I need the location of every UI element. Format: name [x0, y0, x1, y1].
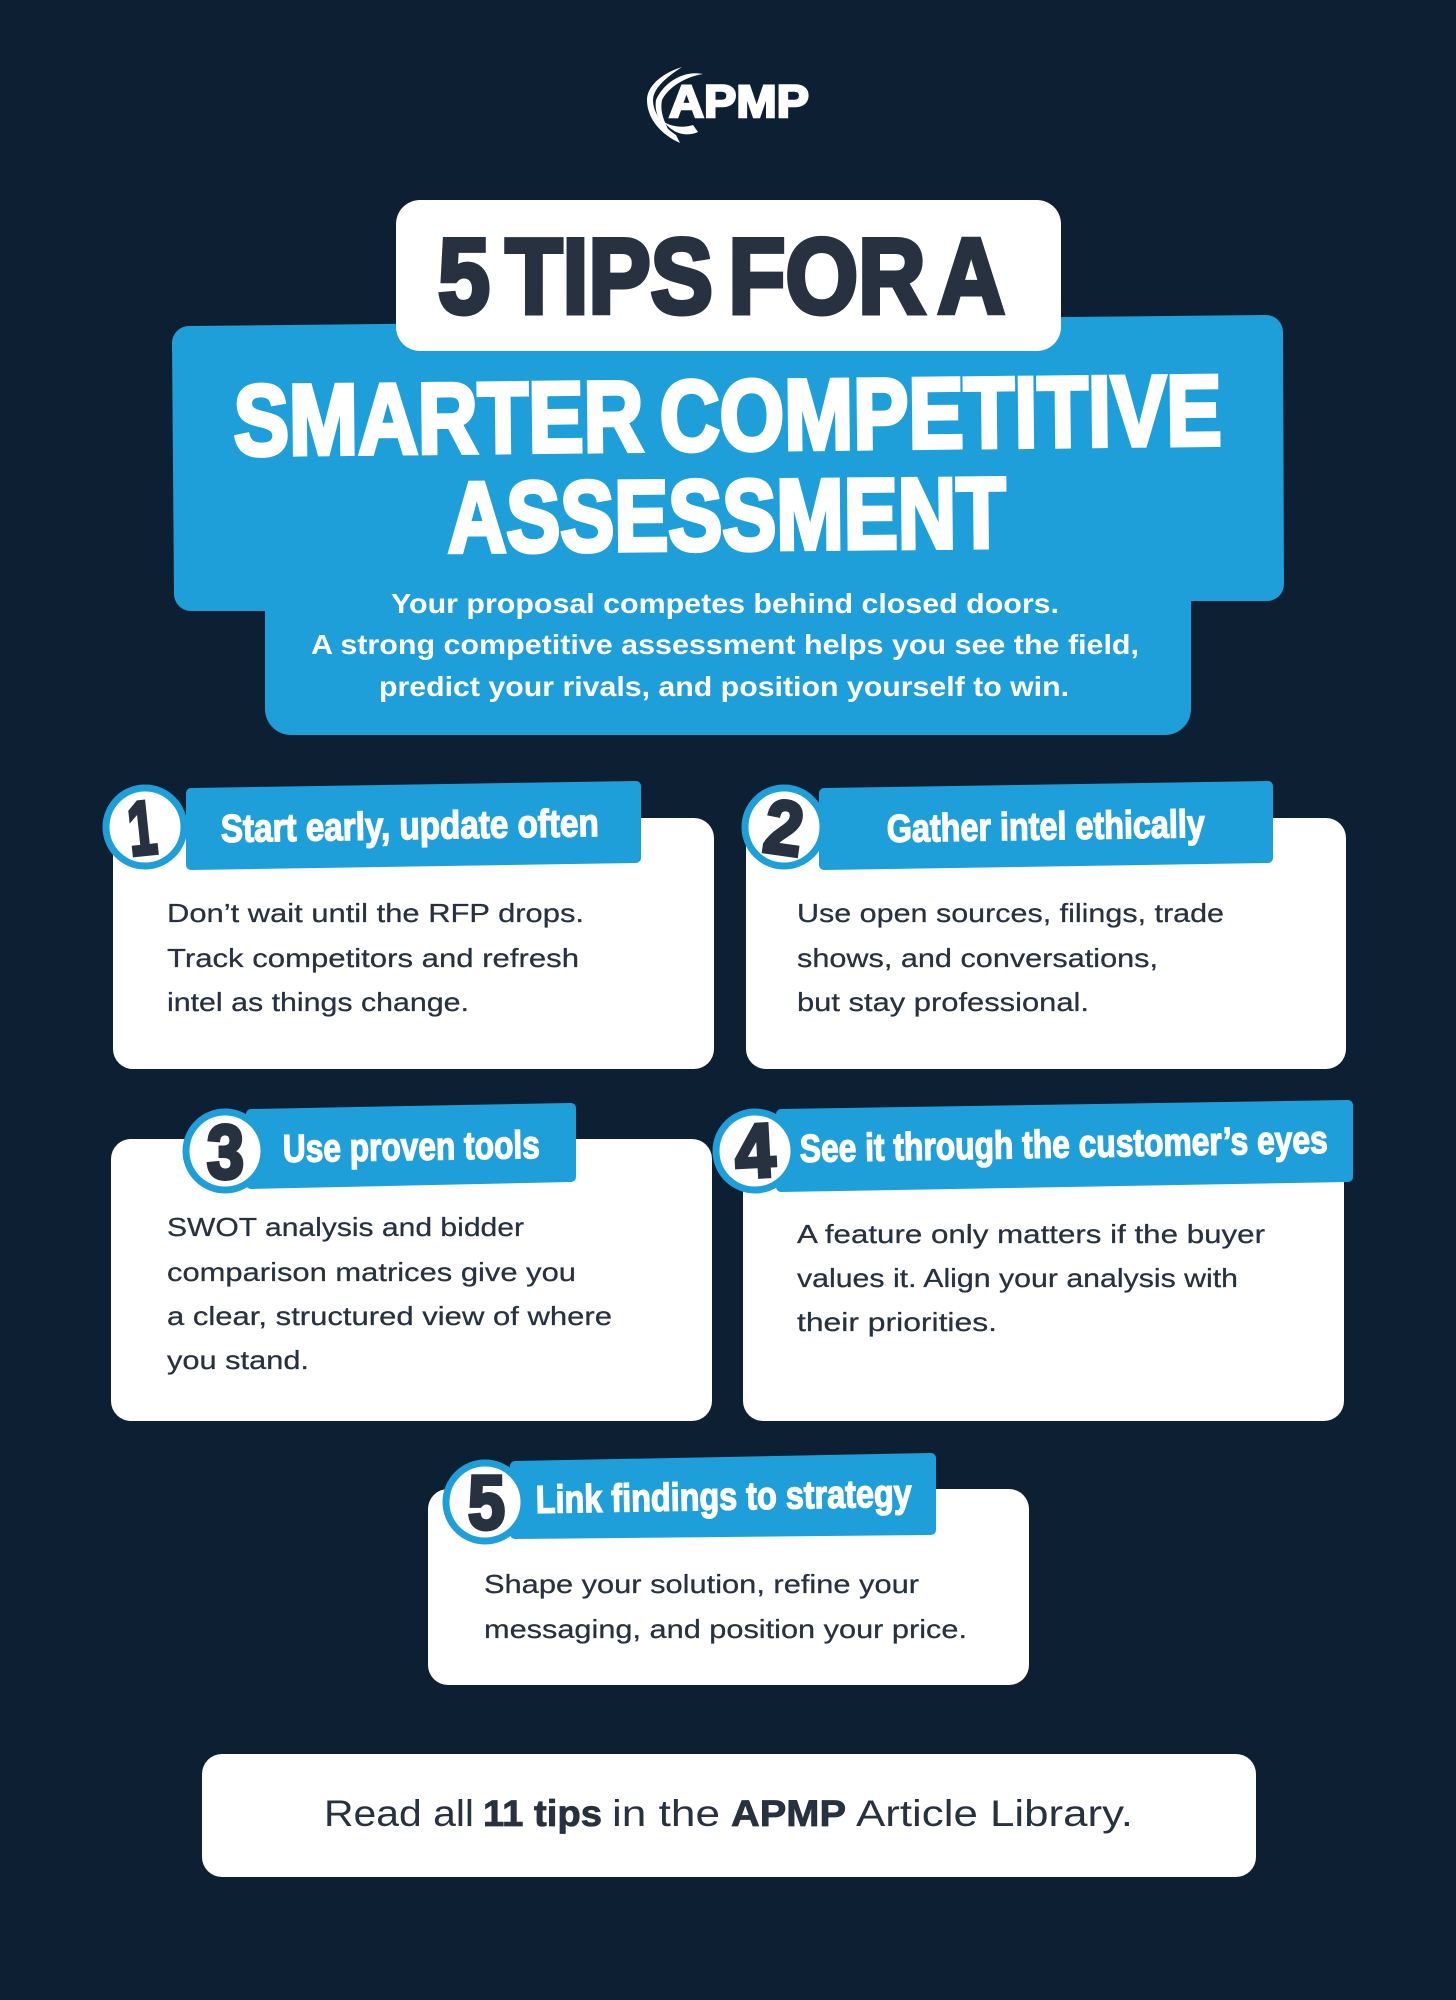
- callout: read all tips: 11 tips: [483, 1793, 602, 1834]
- body 4: values it. Align your analysis with: [797, 1263, 1238, 1293]
- body 1: Don’t wait until the RFP drops.: [167, 898, 584, 928]
- logo: APMP: APMP: [669, 76, 809, 127]
- badge 2: [745, 784, 823, 873]
- logo: APMP: [647, 67, 809, 143]
- body 4: A feature only matters if the buyer: [797, 1219, 1265, 1249]
- badge 4: [716, 1108, 794, 1195]
- body 3: you stand.: [167, 1345, 309, 1375]
- ribbon 1: [191, 786, 636, 865]
- body 3: [167, 1212, 612, 1375]
- intro text: predict your rivals, and position yourself to win.: [379, 671, 1069, 702]
- ribbon 3: [251, 1108, 571, 1184]
- title: assessment: ASSESSMENT: [447, 457, 1006, 574]
- heading 1: Start early, update often: [220, 802, 599, 851]
- intro text: [311, 588, 1139, 702]
- card 4: [743, 1138, 1344, 1421]
- ribbon 5: [515, 1458, 931, 1534]
- callout: read all tips: Read all: [324, 1793, 474, 1834]
- body 4: their priorities.: [797, 1307, 997, 1337]
- body 5: Shape your solution, refine your: [484, 1569, 919, 1599]
- callout: read all tips: in the: [612, 1793, 720, 1834]
- badge 5: 5: [468, 1461, 505, 1546]
- card 5: [428, 1489, 1029, 1685]
- panel: tip 2: [745, 784, 1346, 1069]
- title: smarter competitive: SMARTER COMPETITIVE: [233, 355, 1222, 477]
- body 1: Track competitors and refresh: [167, 943, 579, 973]
- panel: tip 3: [111, 1108, 712, 1421]
- card 3: [111, 1139, 712, 1421]
- body 5: [484, 1569, 967, 1644]
- body 3: a clear, structured view of where: [167, 1301, 612, 1331]
- intro text: Your proposal competes behind closed doors.: [391, 588, 1059, 619]
- title: 5 tips for a: 5 TIPS FOR A: [438, 216, 1005, 336]
- body 1: intel as things change.: [167, 987, 469, 1017]
- heading 3: Use proven tools: [282, 1124, 540, 1171]
- panel: tip 4: [716, 1105, 1348, 1421]
- intro text: A strong competitive assessment helps you see the field,: [311, 629, 1139, 660]
- body 2: but stay professional.: [797, 987, 1089, 1017]
- heading 2: Gather intel ethically: [886, 803, 1205, 851]
- body 2: Use open sources, filings, trade: [797, 898, 1224, 928]
- card 1: [113, 818, 714, 1069]
- ribbon 4: [781, 1105, 1348, 1187]
- callout: read all tips: Article Library.: [856, 1793, 1133, 1834]
- callout: read all tips: [202, 1754, 1256, 1877]
- badge 5: [446, 1461, 524, 1546]
- body 4: [797, 1219, 1265, 1337]
- body 2: [797, 898, 1224, 1017]
- heading 5: Link findings to strategy: [535, 1472, 912, 1522]
- panel: tip 5: [428, 1458, 1029, 1685]
- white title tab: [396, 200, 1061, 351]
- badge 4: 4: [733, 1108, 777, 1195]
- body 3: SWOT analysis and bidder: [167, 1212, 524, 1242]
- blue title panel: [189, 332, 1267, 735]
- body 2: shows, and conversations,: [797, 943, 1158, 973]
- body 5: messaging, and position your price.: [484, 1614, 967, 1644]
- badge 2: 2: [759, 784, 809, 873]
- heading 4: See it through the customer’s eyes: [799, 1119, 1328, 1171]
- callout: read all tips: APMP: [731, 1793, 846, 1834]
- badge 3: [186, 1110, 264, 1195]
- badge 1: 1: [124, 785, 161, 873]
- card 2: [746, 818, 1346, 1069]
- badge 1: [106, 785, 184, 873]
- badge 3: 3: [207, 1110, 244, 1195]
- body 1: [167, 898, 584, 1017]
- header banner: [189, 200, 1267, 735]
- body 3: comparison matrices give you: [167, 1257, 576, 1287]
- ribbon 2: [824, 786, 1268, 865]
- panel: tip 1: [106, 785, 714, 1069]
